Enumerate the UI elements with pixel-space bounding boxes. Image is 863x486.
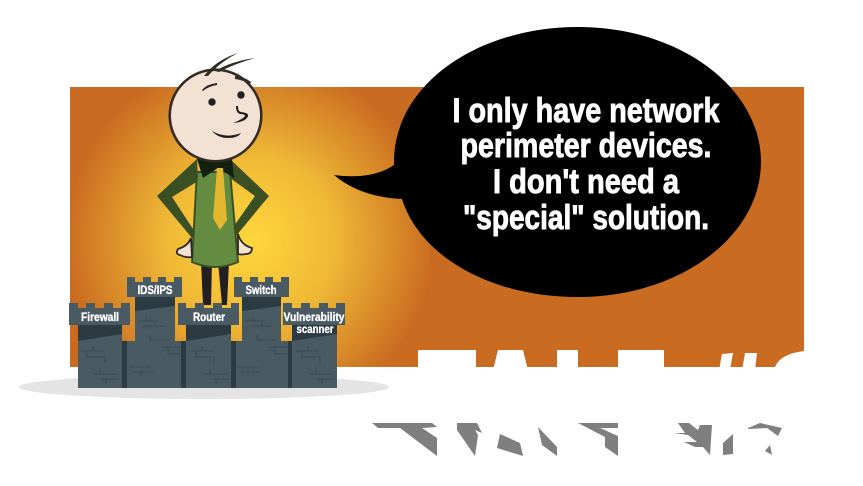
hair (204, 53, 255, 84)
face (202, 83, 248, 138)
tower cap: Vulnerability scanner: scanner (296, 324, 334, 336)
title reflection shards (372, 423, 782, 456)
speech bubble (334, 27, 761, 297)
tower cap: Firewall: Firewall (81, 312, 119, 324)
tower cap: Firewall (69, 303, 130, 325)
walls (78, 297, 337, 388)
tower cap: Router (178, 303, 239, 325)
bubble text: I don't need a (493, 163, 680, 201)
panel: orange background (70, 87, 804, 367)
bubble text (452, 92, 720, 237)
bubble text: perimeter devices. (460, 127, 712, 165)
title: TALE #3: TALE #3 (418, 352, 804, 451)
bricks (81, 317, 333, 384)
tower cap: Switch (234, 277, 289, 297)
character (157, 53, 269, 305)
collar (197, 159, 234, 178)
castle (69, 277, 345, 388)
tower cap: Vulnerability scanner: Vulnerability (284, 312, 345, 324)
bubble text: "special" solution. (463, 199, 709, 237)
head (170, 70, 261, 161)
tower cap: Vulnerability scanner (283, 303, 345, 336)
panel: glow (70, 87, 430, 367)
tie (213, 168, 227, 230)
torso (192, 172, 238, 267)
wall shadows (78, 297, 337, 388)
tower cap: IDS/IPS (127, 277, 182, 297)
arms (157, 159, 269, 238)
bubble text: I only have network (452, 92, 720, 130)
tower cap: IDS/IPS: IDS/IPS (138, 285, 173, 297)
tower cap: Router: Router (193, 312, 225, 324)
shadow (19, 375, 389, 399)
tower cap: Switch: Switch (246, 285, 276, 297)
legs (201, 262, 229, 305)
hands (177, 234, 252, 257)
